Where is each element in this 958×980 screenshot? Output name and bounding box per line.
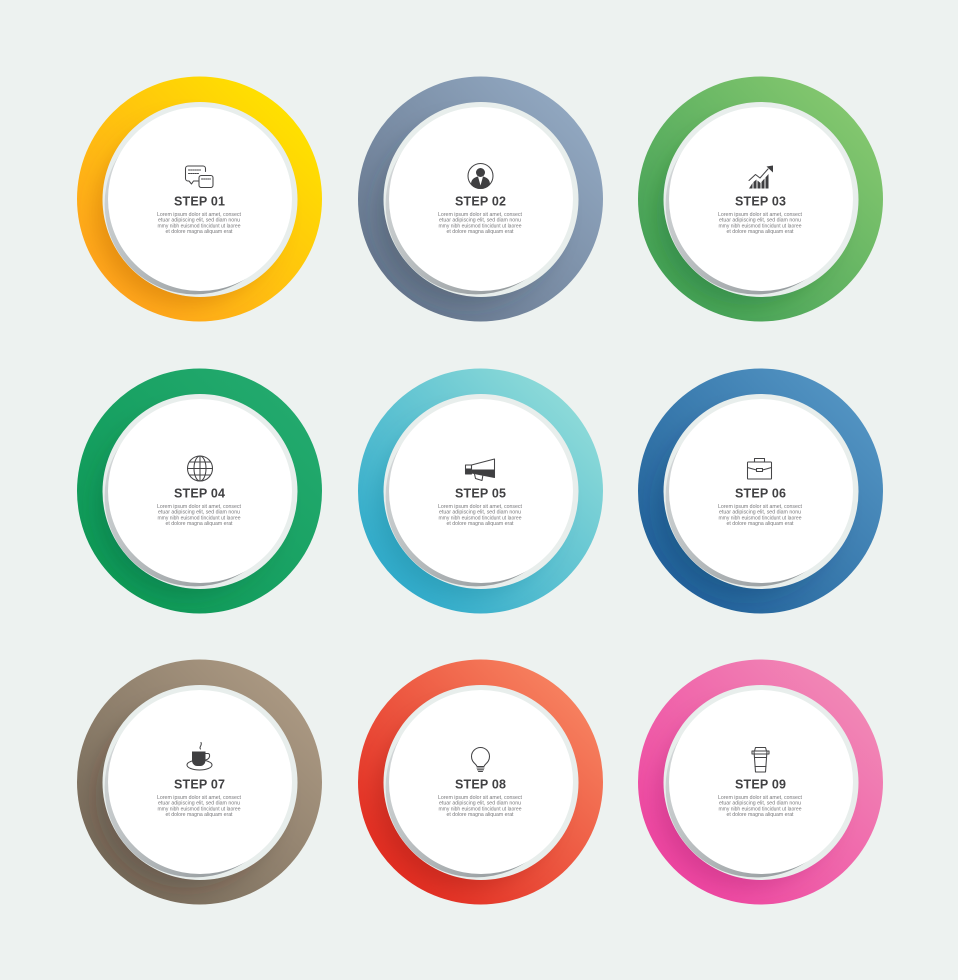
ring: blue: [638, 368, 883, 614]
ring shadow: [96, 121, 280, 305]
panel: step 05: [358, 368, 603, 614]
body text: mmy nibh euismod tincidunt ut laoree: [718, 806, 802, 812]
heading: STEP 08: [455, 778, 506, 792]
body text: et dolore magna aliquam erat: [166, 229, 233, 235]
body text: Lorem ipsum dolor sit amet, consect: [438, 504, 523, 510]
white disc: [669, 399, 853, 583]
body text: etuar adipiscing elit, sed diam nonu: [719, 801, 801, 807]
ring: red: [358, 660, 603, 904]
panel: step 08: [358, 660, 603, 904]
icon: light bulb: [472, 748, 490, 772]
icon: rising bar chart: [749, 166, 773, 188]
ring shadow: [654, 448, 824, 599]
disc crescent: [105, 114, 285, 294]
body text: etuar adipiscing elit, sed diam nonu: [158, 801, 240, 807]
body text: etuar adipiscing elit, sed diam nonu: [439, 801, 521, 807]
body text: Lorem ipsum dolor sit amet, consect: [157, 504, 242, 510]
body text: mmy nibh euismod tincidunt ut laoree: [718, 515, 802, 521]
disc crescent: [105, 406, 285, 586]
disc rim: [664, 102, 858, 297]
body text: Lorem ipsum dolor sit amet, consect: [718, 212, 803, 218]
ring shadow: [372, 730, 540, 892]
ring shadow: [653, 150, 818, 308]
disc rim: [102, 102, 298, 297]
disc rim: [384, 394, 578, 589]
white disc: [108, 399, 292, 583]
white disc: [669, 107, 853, 291]
disc rim: [102, 685, 298, 880]
body text: etuar adipiscing elit, sed diam nonu: [439, 510, 521, 516]
body text: Lorem ipsum dolor sit amet, consect: [718, 795, 803, 801]
body text: mmy nibh euismod tincidunt ut laoree: [158, 515, 241, 521]
heading: STEP 03: [735, 194, 786, 208]
white disc: [389, 399, 573, 583]
body text: mmy nibh euismod tincidunt ut laoree: [158, 806, 241, 812]
disc crescent: [386, 114, 566, 294]
body text: etuar adipiscing elit, sed diam nonu: [719, 218, 801, 224]
heading: STEP 06: [735, 486, 786, 500]
icon: person in circle: [468, 164, 493, 189]
body text: Lorem ipsum dolor sit amet, consect: [157, 212, 242, 218]
white disc: [389, 107, 573, 291]
panel: step 06: [638, 368, 883, 614]
heading: STEP 01: [174, 194, 225, 208]
ring: aqua: [358, 368, 603, 614]
ring: green: [77, 368, 322, 614]
disc rim: [384, 685, 578, 880]
body text: et dolore magna aliquam erat: [166, 812, 233, 818]
ring: light green: [638, 76, 883, 322]
heading: STEP 02: [455, 194, 506, 208]
heading: STEP 09: [735, 778, 786, 792]
ring: brown: [77, 660, 322, 904]
icon: coffee cup: [187, 742, 212, 770]
panel: step 09: [638, 660, 883, 904]
body text: et dolore magna aliquam erat: [726, 229, 794, 235]
ring shadow: [94, 452, 246, 598]
disc crescent: [666, 697, 846, 877]
body text: et dolore magna aliquam erat: [726, 812, 794, 818]
body text: etuar adipiscing elit, sed diam nonu: [158, 218, 240, 224]
ring shadow: [376, 452, 528, 598]
ring: yellow: [77, 76, 322, 322]
body text: [157, 504, 242, 527]
disc rim: [102, 394, 298, 589]
body text: et dolore magna aliquam erat: [446, 229, 514, 235]
white disc: [108, 107, 292, 291]
disc crescent: [105, 697, 285, 877]
body text: etuar adipiscing elit, sed diam nonu: [158, 510, 240, 516]
disc rim: [664, 394, 858, 589]
body text: Lorem ipsum dolor sit amet, consect: [157, 795, 242, 801]
disc rim: [664, 685, 858, 880]
body text: [718, 795, 803, 818]
white disc: [669, 690, 853, 874]
body text: [157, 212, 242, 235]
body text: Lorem ipsum dolor sit amet, consect: [438, 795, 523, 801]
body text: et dolore magna aliquam erat: [446, 521, 514, 527]
body text: [438, 504, 523, 527]
ring shadow: [373, 140, 546, 308]
body text: [718, 504, 803, 527]
icon: chat bubbles: [186, 166, 213, 188]
icon: megaphone: [466, 459, 494, 480]
body text: mmy nibh euismod tincidunt ut laoree: [718, 223, 802, 229]
body text: mmy nibh euismod tincidunt ut laoree: [158, 223, 241, 229]
heading: STEP 07: [174, 778, 225, 792]
body text: [438, 795, 523, 818]
icon: globe: [188, 456, 212, 481]
body text: mmy nibh euismod tincidunt ut laoree: [438, 515, 522, 521]
white disc: [389, 690, 573, 874]
body text: [438, 212, 523, 235]
body text: et dolore magna aliquam erat: [166, 521, 233, 527]
panel: step 07: [77, 660, 322, 904]
ring: slate blue: [358, 76, 603, 322]
body text: Lorem ipsum dolor sit amet, consect: [438, 212, 523, 218]
icon: briefcase: [748, 458, 772, 479]
ring: pink: [638, 660, 883, 904]
ring shadow: [96, 704, 280, 888]
panel: step 04: [77, 368, 322, 614]
body text: mmy nibh euismod tincidunt ut laoree: [438, 223, 522, 229]
icon: takeaway cup: [752, 748, 769, 772]
disc crescent: [386, 697, 566, 877]
disc crescent: [666, 114, 846, 294]
panel: step 03: [638, 76, 883, 322]
white disc: [108, 690, 292, 874]
body text: mmy nibh euismod tincidunt ut laoree: [438, 806, 522, 812]
panel: step 02: [358, 76, 603, 322]
body text: etuar adipiscing elit, sed diam nonu: [719, 510, 801, 516]
body text: [718, 212, 803, 235]
body text: [157, 795, 242, 818]
body text: Lorem ipsum dolor sit amet, consect: [718, 504, 803, 510]
panel: step 01: [77, 76, 322, 322]
body text: etuar adipiscing elit, sed diam nonu: [439, 218, 521, 224]
disc crescent: [386, 406, 566, 586]
heading: STEP 05: [455, 486, 506, 500]
disc rim: [384, 102, 578, 297]
body text: et dolore magna aliquam erat: [726, 521, 794, 527]
body text: et dolore magna aliquam erat: [446, 812, 514, 818]
heading: STEP 04: [174, 486, 225, 500]
ring shadow: [654, 737, 812, 891]
disc crescent: [666, 406, 846, 586]
